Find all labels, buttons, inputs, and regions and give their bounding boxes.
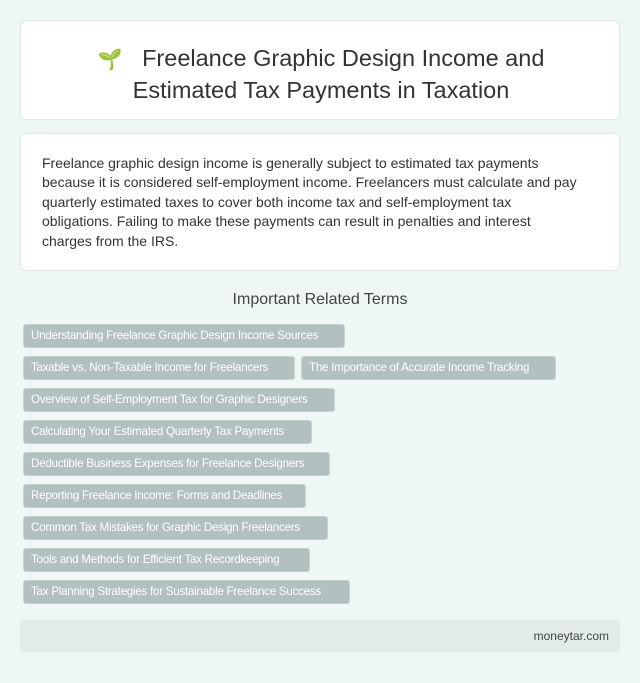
title: Estimated Tax Payments in Taxation	[133, 77, 509, 103]
tag 7	[23, 484, 306, 508]
tag 5	[23, 420, 312, 444]
tag 2	[23, 356, 295, 380]
tag 1: Understanding Freelance Graphic Design Income Sources	[31, 329, 318, 342]
tag 10: Tax Planning Strategies for Sustainable Freelance Success	[31, 585, 321, 598]
description text: Freelance graphic design income is generally subject to estimated tax payments because it is considered self-employment income. Freelancers must calculate and pay quarterly estimated taxes to cover both income tax and self-employment tax obligations. Failing to make these payments can result in penalties and interest charges from the IRS.	[42, 155, 577, 249]
tag 10	[23, 580, 350, 604]
tag 8	[23, 516, 328, 540]
title: 🌱 Freelance Graphic Design Income and	[98, 45, 544, 71]
footer source: moneytar.com	[534, 629, 609, 643]
section heading: Important Related Terms	[233, 291, 407, 308]
tag 1	[23, 324, 345, 348]
tag 5: Calculating Your Estimated Quarterly Tax Payments	[31, 425, 284, 438]
footer	[20, 620, 620, 652]
tag 9: Tools and Methods for Efficient Tax Recordkeeping	[31, 553, 279, 566]
title	[98, 45, 544, 103]
tag 6	[23, 452, 330, 476]
tag 4: Overview of Self-Employment Tax for Graphic Designers	[31, 393, 308, 406]
tag 4	[23, 388, 335, 412]
tag 3	[301, 356, 556, 380]
title card	[20, 20, 620, 120]
tag 6: Deductible Business Expenses for Freelance Designers	[31, 457, 304, 470]
tag 7: Reporting Freelance Income: Forms and Deadlines	[31, 489, 282, 502]
description card	[20, 133, 620, 271]
tag 2: Taxable vs. Non-Taxable Income for Freelancers	[31, 361, 268, 374]
tag 9	[23, 548, 310, 572]
tag 3: The Importance of Accurate Income Tracking	[309, 361, 529, 374]
tag 8: Common Tax Mistakes for Graphic Design Freelancers	[31, 521, 300, 534]
